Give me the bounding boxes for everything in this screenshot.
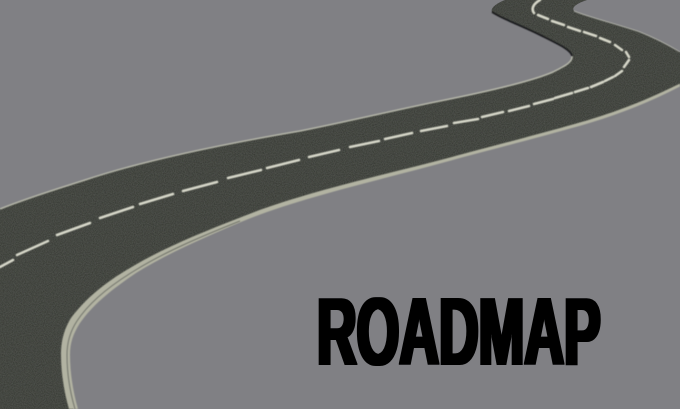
far right road edge — [574, 11, 680, 52]
far curve shadow edge — [492, 12, 572, 56]
center dashed line — [0, 0, 629, 267]
curb inner line — [67, 221, 240, 409]
upper road edge line — [0, 56, 572, 209]
title: ROADMAP: ROADMAP — [317, 277, 601, 385]
lower curb band — [61, 84, 680, 409]
